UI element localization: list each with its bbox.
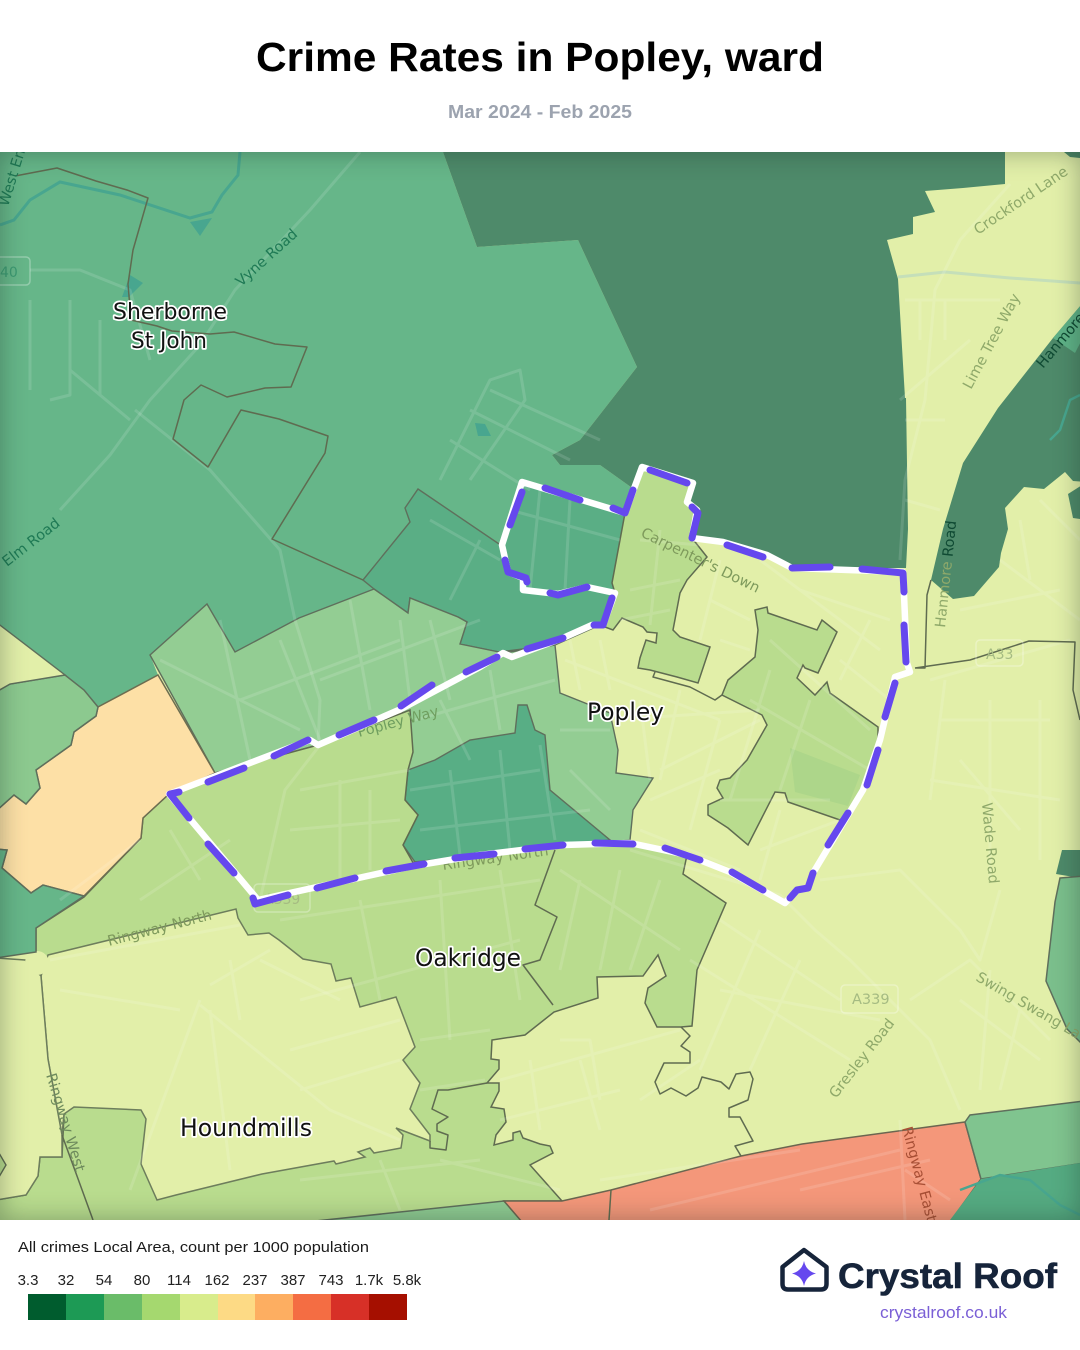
road labels: Crockford Lane bbox=[971, 164, 1071, 238]
region: top-left lemon corner bbox=[0, 622, 65, 692]
road labels: Wade Road bbox=[978, 802, 1001, 884]
base low-crime area bbox=[0, 152, 1080, 1220]
region: Popley north strip bbox=[605, 467, 710, 683]
region: south-east light green bbox=[965, 1101, 1080, 1179]
legend values: 54 bbox=[96, 1272, 112, 1289]
road labels: Swing Swang La bbox=[973, 970, 1080, 1042]
region: top-right dark sliver bbox=[1064, 152, 1080, 158]
website link: crystalroof.co.uk bbox=[880, 1304, 1008, 1322]
map panel bbox=[0, 152, 1080, 1220]
region: Popley east block bbox=[708, 607, 878, 845]
legend title: All crimes Local Area, count per 1000 population bbox=[18, 1239, 369, 1256]
region: Houndmills bbox=[41, 909, 430, 1200]
place label: Sherborne St John bbox=[113, 299, 227, 354]
shaded green park patch bbox=[790, 748, 860, 806]
ward boundary: white casing bbox=[169, 467, 910, 903]
region: west medium green bbox=[0, 849, 84, 958]
region: yellow-green Popley south-west and Oakridge bbox=[0, 710, 726, 1224]
region: light green Popley west bbox=[150, 589, 653, 866]
legend values bbox=[18, 1272, 422, 1289]
river crossing east bbox=[898, 272, 1080, 283]
region: Sherborne St John bbox=[0, 152, 637, 707]
region: west of Ringway West bbox=[0, 958, 62, 1200]
legend values: 237 bbox=[242, 1272, 268, 1289]
legend colour bar bbox=[28, 1294, 407, 1320]
region: east green bbox=[1046, 876, 1080, 1046]
place label: Popley: Popley bbox=[587, 698, 664, 726]
place label: Sherborne St John: Sherborne bbox=[113, 299, 227, 325]
region: Hanmore patch bbox=[1053, 298, 1080, 353]
road labels: A339 bbox=[264, 892, 300, 908]
road labels: Gresley Road bbox=[827, 1016, 898, 1101]
region: north-west light green bbox=[0, 675, 98, 811]
legend values: 32 bbox=[58, 1272, 74, 1289]
logo wordmark: Crystal Roof bbox=[838, 1257, 1057, 1296]
road labels: A339 bbox=[852, 992, 890, 1008]
road labels: Popley Way bbox=[356, 704, 441, 741]
place label: Sherborne St John: St John bbox=[131, 328, 207, 354]
legend values: 387 bbox=[280, 1272, 306, 1289]
legend values: 80 bbox=[134, 1272, 150, 1289]
road labels: Ringway West bbox=[42, 1071, 87, 1174]
legend values: 743 bbox=[318, 1272, 344, 1289]
region: dark low-crime north bbox=[443, 152, 1005, 568]
legend values: 114 bbox=[167, 1272, 191, 1289]
road labels: 40 bbox=[0, 265, 18, 281]
road labels: Ringway North bbox=[106, 908, 214, 950]
region: right dark wedge bbox=[931, 298, 1080, 599]
road labels: Carpenter's Down bbox=[638, 525, 762, 597]
road labels: Vyne Road bbox=[233, 226, 301, 290]
road labels: Hanmore Road bbox=[933, 520, 960, 628]
road shields bbox=[0, 257, 1023, 1013]
water features bbox=[0, 152, 1080, 1215]
region: south salmon bbox=[504, 1122, 981, 1222]
region: south-east medium green bbox=[950, 1163, 1080, 1220]
title: Crime Rates in Popley, ward bbox=[256, 34, 824, 80]
legend values: 162 bbox=[204, 1272, 230, 1289]
region: right dark lower piece bbox=[1068, 482, 1080, 520]
road network bbox=[30, 152, 1080, 1220]
legend values: 3.3 bbox=[18, 1272, 38, 1289]
place label: Houndmills: Houndmills bbox=[180, 1114, 312, 1142]
legend values: 1.7k bbox=[355, 1272, 384, 1289]
region: orange high crime bbox=[0, 675, 215, 896]
road labels: Lime Tree Way bbox=[960, 291, 1024, 392]
place label: Oakridge: Oakridge bbox=[415, 944, 521, 972]
icon: Crystal Roof house logo bbox=[782, 1250, 826, 1290]
roundabout bbox=[25, 951, 49, 975]
road labels: A33 bbox=[986, 647, 1013, 663]
ward boundary: purple dashes bbox=[170, 470, 906, 904]
boundary lines bbox=[15, 168, 1080, 1220]
road labels: Ringway North bbox=[441, 843, 550, 874]
legend values: 5.8k bbox=[393, 1272, 422, 1289]
small green patch at left edge bbox=[0, 1148, 6, 1182]
subtitle: Mar 2024 - Feb 2025 bbox=[448, 101, 632, 122]
region: south strip green bbox=[306, 1201, 524, 1222]
region: east dark corner bbox=[1056, 850, 1080, 878]
road labels: Elm Road bbox=[0, 515, 63, 570]
region: dark inner Popley bbox=[403, 705, 610, 862]
region: enclave darker green bbox=[363, 482, 625, 652]
road labels bbox=[0, 147, 1080, 1224]
